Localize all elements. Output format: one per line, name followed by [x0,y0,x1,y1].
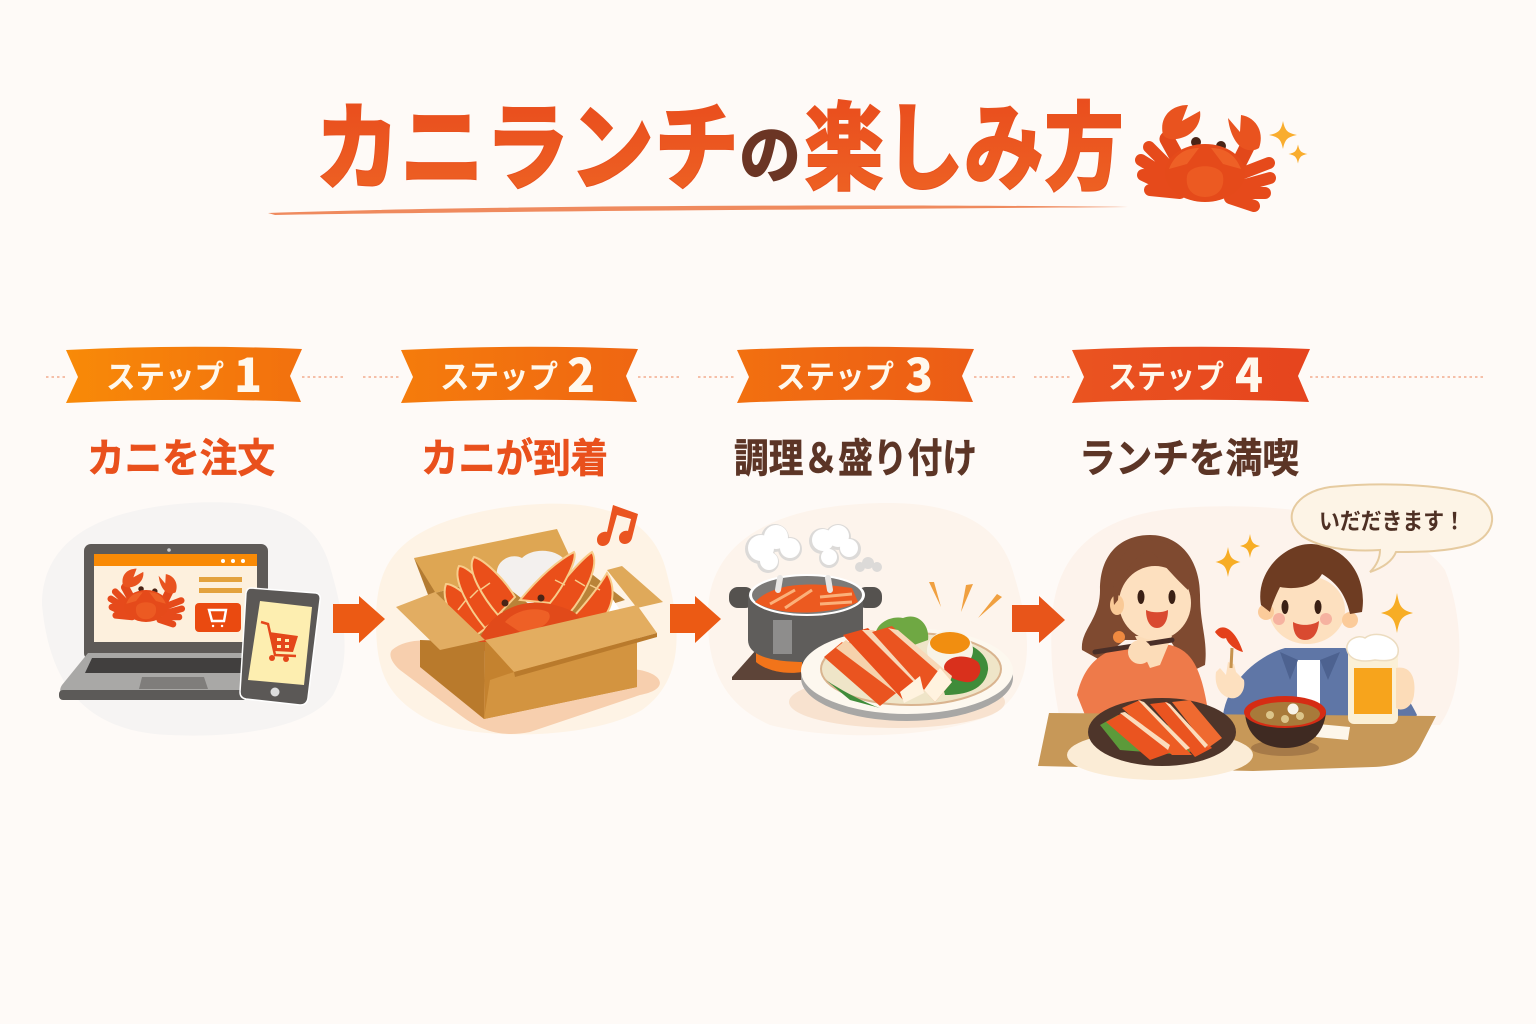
banner: step 3: 3 [905,340,933,406]
banner: step 4 [1072,340,1310,406]
man [1215,544,1417,725]
icon: main crab platter [1067,698,1253,780]
icon: napkin [1316,724,1350,740]
panel: cooking and plating [708,503,1027,735]
speech bubble [1292,484,1492,572]
title underline [268,205,1128,215]
title: カニランチ [315,71,739,210]
woman [1077,535,1207,715]
step 2 column [376,340,677,734]
banner: step 1 [66,340,302,406]
heading: step 4: ランチを満喫 [1079,426,1299,484]
table [1038,713,1436,771]
icon: music note [597,505,638,546]
icon: beer mug [1347,634,1414,724]
banner: step 2 [401,340,638,406]
step 3 column [708,340,1027,735]
banner: step 3 [737,340,974,406]
title [315,71,1124,210]
banner: step 3: ステップ [776,352,894,398]
icon: plate of crab legs [801,617,1013,721]
step 1 column [42,340,345,736]
icon: steam [745,524,882,573]
arrow 1 [333,596,385,643]
banner: step 2: 2 [567,340,595,406]
icon: pot on stove [729,574,882,680]
panel: couple enjoying lunch [1038,484,1492,780]
title: の [739,105,801,197]
heading: step 2: カニが到着 [421,426,608,484]
icon: laptop [59,544,268,700]
icon: cardboard box with crab legs [396,529,663,719]
icon: miso soup bowl [1244,696,1326,756]
banner: step 4: 4 [1235,340,1263,406]
icon: title crab with sparkles [1141,105,1308,206]
icon: smartphone with cart [240,588,320,705]
speech bubble: いだだきます！ [1319,502,1465,536]
banner: step 1: ステップ [106,352,224,398]
icon: sparkle lines [929,582,1002,618]
heading: step 3: 調理＆盛り付け [734,426,977,484]
heading: step 1: カニを注文 [87,426,275,484]
title: 楽しみ方 [804,71,1124,210]
banner: step 1: 1 [234,340,262,406]
icon: plate shadow [789,676,1005,728]
arrow 3 [1012,596,1065,643]
dotted timeline [46,376,1486,378]
panel: order on laptop and phone [42,502,345,736]
step 4 column [1038,340,1492,780]
box shadow [390,641,660,734]
banner: step 4: ステップ [1108,352,1224,398]
arrow 2 [670,596,721,643]
panel: crab delivered in a box [376,504,677,734]
icon: sparkles [1216,534,1413,633]
banner: step 2: ステップ [440,352,558,398]
